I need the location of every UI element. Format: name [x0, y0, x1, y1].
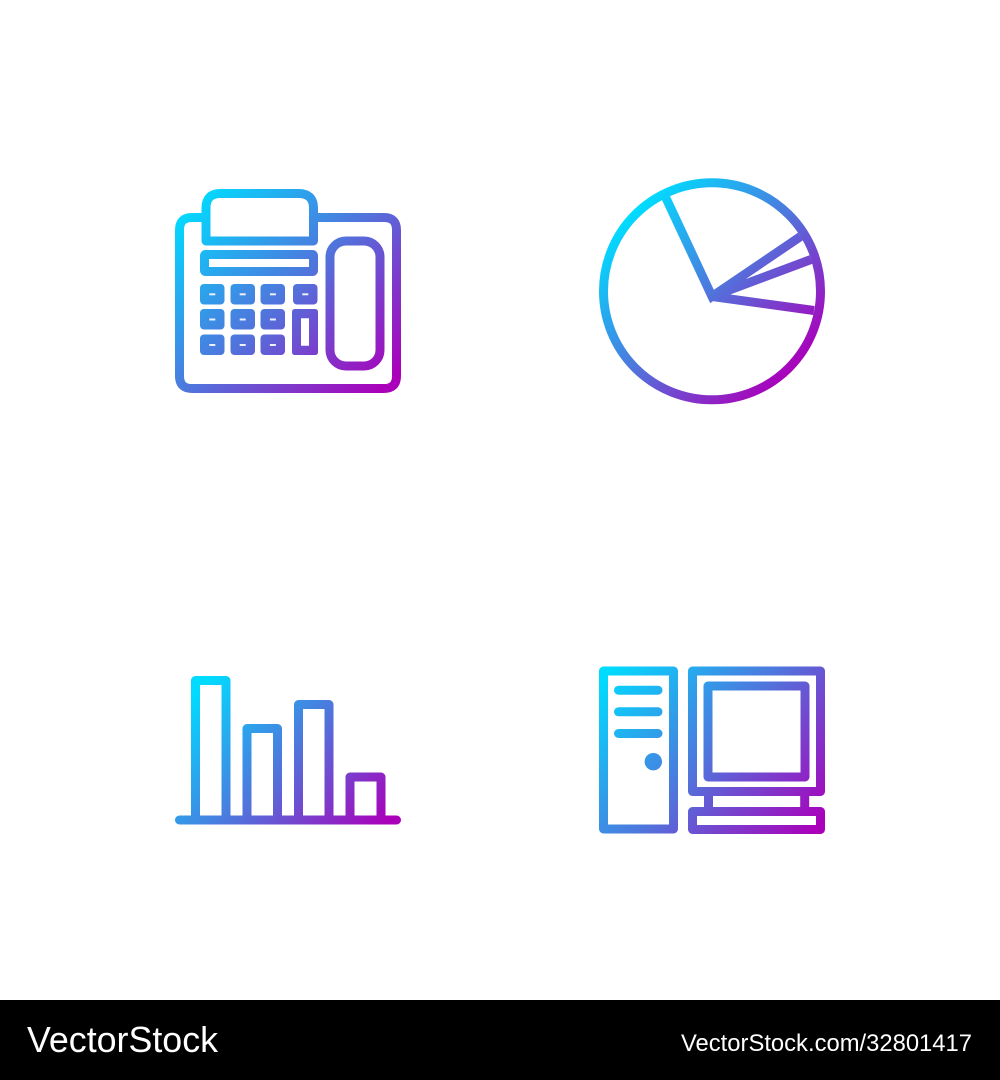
keypad dashes — [209, 293, 308, 346]
icon: pie chart — [604, 183, 820, 400]
monitor stand — [708, 796, 805, 807]
third bar — [298, 704, 329, 820]
phone body — [180, 218, 396, 388]
monitor frame — [692, 671, 820, 792]
image id text: VectorStock.com/32801417 — [681, 1030, 972, 1057]
icon: bar chart — [180, 680, 396, 820]
monitor base — [692, 812, 820, 830]
baseline — [180, 816, 396, 824]
tall bar — [196, 680, 226, 820]
monitor screen — [708, 686, 805, 777]
power button — [645, 753, 662, 770]
short bar — [350, 777, 381, 820]
tower case — [604, 671, 674, 829]
icon: desktop computer — [604, 671, 820, 830]
icon: desk telephone — [180, 194, 396, 388]
handset — [330, 241, 380, 366]
pie slice dividers — [666, 197, 814, 310]
paper cradle — [206, 194, 314, 241]
footer bar — [0, 1000, 1000, 1080]
brand logo text: VectorStock — [27, 1019, 219, 1060]
drive slots — [618, 690, 658, 734]
pie outline — [604, 183, 820, 400]
second bar — [247, 728, 278, 820]
display — [204, 254, 314, 272]
keypad — [200, 284, 318, 355]
